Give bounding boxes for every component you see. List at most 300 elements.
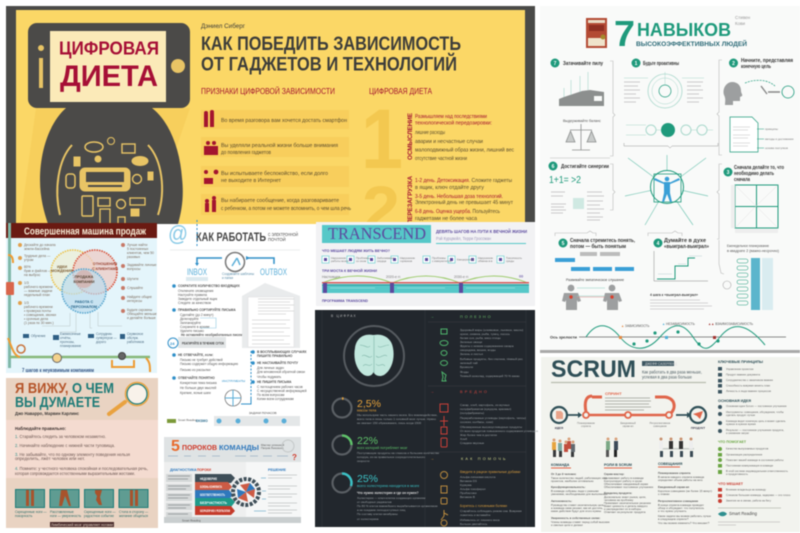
habit headings: 1 <box>635 61 638 67</box>
chart: sprint flow: Ретроспективное <box>650 421 671 425</box>
list: solutions: РЕШЕНИЕ <box>268 468 287 472</box>
text: rules: 4. Помните: у честного человека спокойная и последовательная речь, <box>15 466 148 471</box>
footer logos <box>167 411 300 426</box>
stat: 2.5%: всего тела и лишь только 1 головной мозг лучше. Нужно <box>357 417 436 421</box>
inbox outbox labels: OUTBOX <box>260 267 287 277</box>
lists around venn: Будьте скромны <box>127 308 153 312</box>
section: how to help: Витамин В <box>460 495 475 499</box>
sidebar: principles: Результат — постоянное улучшение продукта, <box>726 428 784 432</box>
stat: 2.5% <box>332 398 438 425</box>
panel: sales machine <box>6 223 157 374</box>
text: rules <box>15 426 148 476</box>
list: vices bars <box>195 468 235 515</box>
lists around venn: разовых <box>127 255 140 259</box>
section: how to help: Альфа-токоферол <box>460 487 486 491</box>
lists around venn: вопросы <box>127 267 141 271</box>
chart: sprint flow: СПРИНТ <box>605 391 622 396</box>
heading: ДЖЕФФ САЗЕРЛЕНД <box>645 362 678 366</box>
list: inbox steps: Сделайте (до 2 минут) <box>180 313 213 317</box>
list: inbox steps: Настройте правила <box>178 293 207 297</box>
lists around venn: интересы <box>127 299 143 303</box>
list: inbox steps: Письмо из рассылки <box>180 368 211 372</box>
section: how to help: Боритесь с головными болями <box>460 504 507 508</box>
heading: author and title: ОТ ГАДЖЕТОВ И ТЕХНОЛОГИЙ <box>201 52 457 76</box>
panel: I see what you think <box>6 378 158 528</box>
icon: scales <box>563 119 601 150</box>
sidebar: principles: ЧТО ПОМОГАЕТ <box>718 440 747 444</box>
habit headings: Затачивайте пилу <box>563 60 604 67</box>
list below venn: работников <box>127 340 144 344</box>
chart: leg positions: радостное событие <box>84 514 114 518</box>
icon: team people <box>552 438 694 457</box>
columns: team, roles, meetings: РОЛИ В SCRUM <box>604 463 632 467</box>
heading: Я ВИЖУ, О ЧЕМ <box>15 380 114 397</box>
list: outbox steps: НЕ НАСТАИВАЙТЕ ПОЧТУ <box>257 361 299 365</box>
lists around venn: и делайте больше <box>127 316 156 320</box>
list: outbox steps <box>251 350 307 401</box>
row: obstacles: обмена в-в <box>478 259 493 263</box>
section: how to help: Больше двигайтесь <box>460 522 488 526</box>
habit headings: сначала <box>734 177 751 183</box>
lists around venn: • совещания, звонки <box>24 313 56 317</box>
list: outbox steps: По всем вопросам <box>257 393 284 397</box>
chart: venn diagram: ИДЕИ <box>57 265 67 269</box>
sidebar: principles: Качество выпускаемых продуктов <box>726 446 769 450</box>
row: obstacles: ЧТО МЕШАЕТ ЛЮДЯМ ЖИТЬ ВЕЧНО? <box>322 249 391 253</box>
columns: team, roles, meetings: в следующем спринте? <box>658 517 689 521</box>
list: vices bars: БЕЗУЧАСТНОСТЬ <box>200 501 228 505</box>
section: useful: Здоровый жиры (оливковое, льняное, масло) <box>460 328 523 332</box>
section: how to help: → <box>430 456 434 461</box>
sidebar: principles: Слишком большая команда, задержки — это плохо <box>726 493 791 497</box>
list: outbox steps: В ВОСПЛЫВАЮЩИХ СЛУЧАЯХ <box>257 350 307 354</box>
list: inbox steps: Заведите отдельный ящик <box>178 297 218 301</box>
section: useful <box>430 314 523 381</box>
section: useful: зеленый чай <box>460 361 478 365</box>
row: obstacles: с иммунитетом <box>432 259 452 263</box>
habit headings: 4 <box>657 241 660 247</box>
habit headings: потом — быть понятым <box>570 243 626 250</box>
chart: weekly plan: в квадрате 2 (важно-несрочно) <box>727 249 780 253</box>
habit headings: Начните, представляя <box>741 58 793 64</box>
columns: team, roles, meetings: Короткое совещание (не более 15 минут) <box>658 489 712 493</box>
section: how to help: КАК ПОМОЧЬ <box>461 457 508 461</box>
chart: leg positions <box>15 490 149 527</box>
chart: sprint flow: скрам-ап <box>623 425 634 428</box>
sidebar: principles: Сотрудничество с заказчиком важнее <box>726 378 774 382</box>
section: useful: ПОЛЕЗНО <box>460 315 493 319</box>
list: diet steps: 1-2 день. Детоксикация. Сложите гаджеты <box>415 178 512 184</box>
chart: maturity axis: ▲ ЗАВИСИМОСТЬ <box>621 324 649 328</box>
columns: team, roles, meetings: Что мы можем изменить? Что мешает? <box>658 521 710 525</box>
list: signs of addiction: Вы набираете сообщение, когда разговариваете <box>221 198 339 204</box>
section: how to help: Введите в рацион правильные добавки <box>460 470 521 474</box>
sidebar: principles: ЧТО МЕШАЕТ <box>718 482 744 486</box>
list: signs of addiction: Вы уделяли реальной жизни больше внимания <box>221 142 338 149</box>
section: harmful: Хлеб <box>460 437 467 441</box>
lists around venn: недельный план <box>24 293 50 297</box>
icon: document <box>730 117 794 152</box>
heading: Как работать в два раза меньше, <box>642 370 702 374</box>
list: diet steps: 3-5 день. Небольшая доза технологий. <box>415 193 503 200</box>
footer logos: EKSMO <box>196 419 208 423</box>
chart: venn diagram: С КЛИЕНТАМИ <box>92 267 118 271</box>
habit headings: Думайте в духе <box>664 237 706 244</box>
section headings <box>201 85 432 96</box>
columns: team, roles, meetings: КОМАНДА <box>551 463 570 467</box>
section: useful: Брокколи <box>460 365 473 369</box>
sidebar: principles: ОСНОВНАЯ ИДЕЯ <box>718 399 751 403</box>
columns: team, roles, meetings: Кросфункциональность: <box>551 485 586 489</box>
section: harmful: От всех продуктов повышенного содержания углеводов <box>460 429 538 433</box>
text: rules: 1. Старайтесь следить за человеком незаметно. <box>15 434 106 439</box>
list: diet steps: аварии и несчастные случаи <box>415 139 483 145</box>
lists around venn: 1/3 <box>24 301 29 305</box>
list below venn: Обучение <box>31 334 46 338</box>
section headings: ЦИФРОВАЯ ДИЕТА <box>369 86 432 96</box>
list below venn: Ежемесячные <box>60 332 81 336</box>
braces <box>550 60 724 274</box>
list: signs of addiction: не выходите в Интернет <box>221 178 282 184</box>
chart: sprint flow: Ежедневный <box>620 421 636 425</box>
callout: 24 hours <box>168 337 226 348</box>
callout: 24 hours: 24 <box>170 341 175 346</box>
chart: sprint flow: ПРОДУКТ <box>691 426 705 430</box>
heading: ДЕВЯТЬ ШАГОВ НА ПУТИ К ВЕЧНОЙ ЖИЗНИ <box>436 227 527 234</box>
panel: transcend <box>316 222 535 306</box>
icon: brain <box>344 326 404 386</box>
label: В ЦИФРАХ <box>331 314 357 318</box>
columns: team, roles, meetings: о планах <box>658 492 670 496</box>
section: useful: Бобовые продукты, без глютена, тёмный рис <box>460 357 523 361</box>
stat: 22%: которую, из-за правильное сосредоточительного <box>357 455 425 459</box>
section: useful: смородина, вишня, ягоды <box>460 348 496 352</box>
columns: team, roles, meetings: Автономность: <box>551 499 572 503</box>
stat: 2.5%: массы тела <box>357 408 376 412</box>
list: inbox steps: ОТВЕЧАЙТЕ ПОНЯТНО <box>178 376 215 380</box>
heading: Патрик Ленсиони <box>261 446 284 450</box>
section: useful: орехи, семена, рыба, тунец, лосось <box>460 332 510 336</box>
callout: 24 hours: РЕАГИРУЙТЕ В ТЕЧЕНИЕ СУТОК <box>182 342 225 346</box>
chart: venn diagram: РАБОТА С <box>75 300 94 304</box>
header <box>6 223 157 238</box>
heading: ? <box>292 453 297 462</box>
section headings: ПРИЗНАКИ ЦИФРОВОЙ ЗАВИСИМОСТИ <box>201 85 335 96</box>
icon: clock with arrows <box>195 220 274 272</box>
chart: leg positions: ноги — уверенность <box>50 514 81 518</box>
lists around venn: Обещайте меньше <box>127 312 157 316</box>
row: obstacles: Нарушение <box>478 256 493 260</box>
icon: decision wheel: ИНСТРУМЕНТЫ <box>222 379 246 383</box>
habit headings: 5 <box>562 241 565 247</box>
chart: leg positions: Скрещенные ноги — <box>15 510 47 514</box>
lists around venn: Шутите <box>127 277 139 281</box>
list: inbox steps: Запланируйте <box>180 321 201 325</box>
list: diet steps: ОСМЫСЛЕНИЕ <box>408 113 414 160</box>
heading: 7 habits <box>614 13 751 54</box>
list: outbox steps: Для личных задач <box>257 366 284 370</box>
list: signs of addiction: до появления гаджетов <box>221 150 271 156</box>
diet title: ЦИФРОВАЯ <box>59 38 159 58</box>
chart: venn diagram: МОЖДЕНИЯ <box>51 269 73 273</box>
text: rules: определить, лжёт человек или нет. <box>15 456 85 461</box>
columns: team, roles, meetings: Ретроспективное совещание <box>658 499 699 503</box>
list: diet steps: технологической передозировки: <box>415 120 492 126</box>
icon: at sign: @ <box>168 221 188 246</box>
columns: team, roles, meetings: В команде собраны люди с разными <box>551 489 599 493</box>
stat: 25%: Холестерин — ключ-клетка создающих организм <box>357 496 425 500</box>
section: how to help: Куркума <box>460 483 472 487</box>
lists around venn: утром <box>24 258 34 262</box>
section: how to help: Старайтесь соблюдать режим сна. Вовремя <box>460 509 522 513</box>
stat: 2.5%: 2,5% <box>357 398 381 410</box>
lists around venn: Задавайте личные <box>127 263 157 267</box>
list: diet steps: гаджетами не более часа <box>415 216 477 222</box>
panel: scrum <box>541 356 800 532</box>
list: diet steps: отсутствие частной жизни <box>415 155 467 162</box>
lists around venn: Слушайте <box>127 286 143 290</box>
columns: team, roles, meetings: СОВЕЩАНИЯ <box>658 462 683 466</box>
columns: team, roles, meetings: проектом, наиболее оптимально <box>551 479 594 483</box>
lists around venn: — важные задачи <box>24 289 52 293</box>
chart: empathic listening: Развивайте эмпатическое слушание <box>566 278 624 282</box>
section: harmful: Сладкие вкусные <box>460 441 485 445</box>
text: rules: 3. Не забывайте, что по одному элементу поведения нельзя <box>15 452 130 457</box>
habit headings: Сначала делайте то, что <box>734 164 784 171</box>
icon: gear <box>233 479 259 505</box>
columns: team, roles, meetings: Члены команды ставят перед собой высокие <box>551 520 610 524</box>
habit headings: 2 <box>732 61 735 67</box>
section: harmful: полуфабрикатов (кукуруза, крахмал) <box>460 407 511 411</box>
columns: team, roles, meetings: обзор и обсуждает: что получилось <box>658 506 705 510</box>
row: obstacles: со сном <box>356 259 366 263</box>
icon: book <box>586 18 607 48</box>
columns: team, roles, meetings: а команда сама решает, как её достичь, <box>551 506 603 510</box>
chart: leg positions: Лимбический мозг управляет ногами <box>51 523 113 527</box>
columns: team, roles, meetings: Планирование спринта <box>658 471 691 475</box>
section: harmful: сосиски, колбасы, соки) <box>460 420 493 424</box>
list: diagnosis: ДИАГНОСТИКА <box>170 468 197 472</box>
lists around venn: 5 постоянных <box>127 247 149 251</box>
chart: sprint flow: спринта <box>581 425 591 428</box>
list: outbox steps: НЕ ПИШИТЕ ПИСЬМА <box>257 380 292 384</box>
columns: team, roles, meetings: В конце спринта команда проводит <box>658 503 705 507</box>
lists around venn: Найдите общие <box>127 295 152 299</box>
list: inbox steps: Делегируйте <box>180 317 199 321</box>
columns: team, roles, meetings: От 3 до 9 человек: <box>551 472 577 476</box>
stat: 22% <box>332 435 439 463</box>
list: vices bars: БОЯЗНЬ КОНФЛИКТА <box>200 485 222 489</box>
list: signs of addiction: с ребенком, а потом не можете вспомнить, о чем шла речь <box>221 206 351 212</box>
columns: team, roles, meetings: Знает ценность и деталь каждого <box>604 504 648 508</box>
section: harmful: ВРЕДНО <box>460 390 489 394</box>
list: vices bars: НЕДОВЕРИЕ <box>200 477 218 481</box>
lists around venn: • проверка почты <box>24 309 52 313</box>
row: obstacles: Заболевания <box>377 256 395 260</box>
row: obstacles: Канцерогены <box>457 258 474 262</box>
list: inbox steps: Письмо содержит общую информацию <box>180 362 239 366</box>
stat: 25% <box>332 473 438 521</box>
inbox outbox labels <box>186 267 287 281</box>
text: rules: которая сопровождается естественными выразительными жестами. <box>15 471 135 476</box>
stat: 22%: скорости <box>357 459 370 463</box>
sidebar: principles: Продукт важнее документа <box>726 372 760 376</box>
stat: 25%: По 80 % клеток важнейшего вырабатывается организмом <box>357 504 438 508</box>
lists around venn <box>18 243 157 325</box>
heading: 7 habits: Кови <box>735 21 746 26</box>
inbox outbox labels: INBOX <box>187 267 207 277</box>
list: inbox steps: СОКРАТИТЕ КОЛИЧЕСТВО ВХОДЯЩИХ <box>178 284 241 288</box>
chart: venn diagram: ОТНОШЕНИЯ <box>93 262 117 266</box>
columns: team, roles, meetings: Скрам-мастер: <box>604 472 624 476</box>
section: harmful: (полуфабрикаты) <box>460 411 484 415</box>
icon: scales: Выдерживайте баланс <box>563 119 601 123</box>
list: diet steps: 1 <box>361 92 403 186</box>
list below venn: прогнозы, <box>60 340 75 344</box>
chart: maturity axis: ▲▲ ВЗАИМОЗАВИСИМОСТЬ <box>708 322 753 326</box>
sidebar: principles: В этой системе индивидуальная ответственность <box>726 469 788 473</box>
columns: team, roles, meetings: Владелец продукта: <box>604 491 632 495</box>
chart: flow <box>624 123 718 148</box>
columns: team, roles, meetings: Такое количество людей, работающих над <box>551 476 607 480</box>
section: how to help <box>430 456 522 526</box>
columns: team, roles, meetings: Отвечает за результат продукта <box>604 510 646 514</box>
list: inbox steps: Удалите письмо <box>180 329 204 333</box>
icon: decision wheel <box>222 379 251 406</box>
sidebar: principles: Постоянная коммуникация в команде <box>726 464 774 468</box>
lists around venn: Дескайте до начала <box>24 243 56 247</box>
list below venn: отчёты, <box>60 336 71 340</box>
list: inbox steps: Сохраните в архиве <box>180 325 210 329</box>
section: harmful: Сахар, хлеб, картофель, из мучных <box>460 403 510 407</box>
stat: 25%: 25% <box>357 473 378 485</box>
columns: team, roles, meetings: Обеспечивает ежедневный скрам <box>604 482 648 486</box>
chart: sprint flow: ИДЕЯ <box>555 426 563 430</box>
panel: digital diet <box>6 6 535 246</box>
heading: author and title <box>201 22 461 76</box>
chart: sprint flow <box>551 391 706 430</box>
list: outbox steps: Для мгновенной обратной связи <box>257 370 305 374</box>
subtitle: 7 шагов к неуязвимым компаниям <box>22 368 94 374</box>
row: obstacles <box>322 249 522 263</box>
chart: leg positions: Скрещенные ноги — <box>84 510 116 514</box>
sidebar: principles: Команда видит конечную цель и может сделать <box>726 419 786 423</box>
sidebar: principles <box>718 360 791 525</box>
columns: team, roles, meetings: Принимает окончательное решение <box>604 501 651 505</box>
lists around venn: земли-бассейна <box>24 247 50 251</box>
list: inbox steps: Конкретная тема письма <box>180 381 217 385</box>
chart: leg positions: желание общаться <box>119 514 148 518</box>
heading: ПОРОКОВ <box>182 443 218 452</box>
stat: 2.5%: Мы используем часть нашего мозга. Его взаимодействие, <box>357 413 438 417</box>
list below venn: супергерои — <box>96 336 118 340</box>
section: useful: → <box>430 314 434 319</box>
list: outbox steps: С поглощением рабочих часов <box>257 385 303 389</box>
list below venn: Сервисное <box>127 332 143 336</box>
row: obstacles: Нарушения <box>331 256 346 260</box>
list below venn: дорого <box>96 340 106 344</box>
chart: priority matrix <box>731 185 778 233</box>
chart: sprint flow: совещание <box>653 425 667 428</box>
stat: 25%: а не поедаем легкодоступных пищ <box>357 508 406 512</box>
columns: team, roles, meetings: и что нужно улучшить <box>658 509 687 513</box>
heading: SCRUM <box>551 356 636 383</box>
equation: 1+1= >2 <box>549 175 581 186</box>
row: obstacles: Проблемы <box>356 256 370 260</box>
sidebar: principles: Инструменты: совещания, обсуждения, чтобы <box>726 410 784 414</box>
chart: empathic listening <box>555 252 634 310</box>
section: useful: Темный шоколад, содержащий 70 % какао <box>460 374 520 378</box>
list below venn: планирование <box>60 344 81 348</box>
lists around venn: • срочные дела <box>24 317 48 321</box>
list: diet steps: лишние расходы <box>415 130 445 136</box>
heading: Мастер успешной <box>261 443 285 447</box>
list: outbox steps: Копии всем сотрудникам <box>257 397 294 401</box>
heading: успевая в два раза больше <box>642 374 692 380</box>
heading: 7 habits: НАВЫКОВ <box>637 20 731 40</box>
list: vices bars: ПОРОКИ <box>197 468 212 472</box>
chart: maturity axis: ▲ НЕЗАВИСИМОСТЬ <box>662 322 695 326</box>
heading: ВЫ ДУМАЕТЕ <box>15 394 100 411</box>
list: inbox steps: Письмо не требует действий <box>180 358 223 362</box>
list: inbox steps: ПРАВИЛЬНО СОРТИРУЙТЕ ПИСЬМА <box>178 308 236 312</box>
chart: win-win stairs <box>650 251 712 309</box>
footer logos: Smart Reading <box>178 418 197 422</box>
chart: leg positions: покорность <box>15 514 33 518</box>
columns: team, roles, meetings: Какие задачи мы можем работать лучше <box>658 514 712 518</box>
chart: leg positions: Стопа в сторону — <box>119 510 149 514</box>
section: how to help: Витамин D3 <box>460 479 477 483</box>
chart: venn diagram <box>51 250 118 313</box>
heading <box>551 356 706 383</box>
habit headings: 7 <box>554 61 557 67</box>
row: obstacles: Проблемы <box>432 256 446 260</box>
chart: weekly plan <box>723 244 780 310</box>
panel: dark brain stats <box>315 310 538 527</box>
columns: team, roles, meetings: умениями, необходимыми для выполнения <box>551 492 608 496</box>
columns: team, roles, meetings: Контролирует работу и сроки <box>604 479 642 483</box>
heading <box>15 380 114 416</box>
stat: 2.5%: не хватает 150 образования, лишь когда 1500 <box>357 421 421 425</box>
panel: 7 habits <box>540 6 800 353</box>
row: obstacles: сердца <box>377 259 387 263</box>
row: obstacles: Нарушение <box>400 256 415 260</box>
icon: document: основа поступков <box>765 146 788 150</box>
heading: Джо Наварро, Марвин Карлинс <box>15 411 79 416</box>
habit headings: Будьте проактивны <box>643 61 679 67</box>
list: diet steps: ПЕРЕЗАГРУЗКА <box>408 175 414 224</box>
inbox outbox labels: и папки <box>222 276 233 280</box>
text: rules: Наблюдайте правильно: <box>15 426 66 431</box>
list: inbox steps: НЕ ОТВЕЧАЙТЕ, если: <box>178 353 213 357</box>
row: obstacles: Токсичность <box>506 256 522 260</box>
heading: КАК РАБОТАТЬ <box>196 232 266 244</box>
lists around venn: рабочего времени <box>24 285 53 289</box>
columns: team, roles, meetings: определяет объем работы на него <box>658 478 703 482</box>
columns: team, roles, meetings: Налаживает работу в команде <box>604 476 644 480</box>
section: harmful: → <box>430 389 434 394</box>
sidebar: principles: Занятия не в связке, работа на бегу <box>726 498 772 502</box>
chart: three bridges: Настоящее <box>322 275 340 279</box>
columns: team, roles, meetings: Ежедневный скрам-ап <box>658 485 689 489</box>
sidebar: principles: нужное в нужное время <box>726 423 756 426</box>
stat: 22%: 22% <box>357 435 378 447</box>
sidebar: principles: Smart Reading <box>729 511 758 516</box>
list: diet steps: малоподвижный образ жизни, лишний вес <box>415 146 514 154</box>
list below venn <box>23 312 144 348</box>
row: obstacles: среды <box>506 259 514 263</box>
habit headings: «выиграл-выиграл» <box>664 244 709 250</box>
